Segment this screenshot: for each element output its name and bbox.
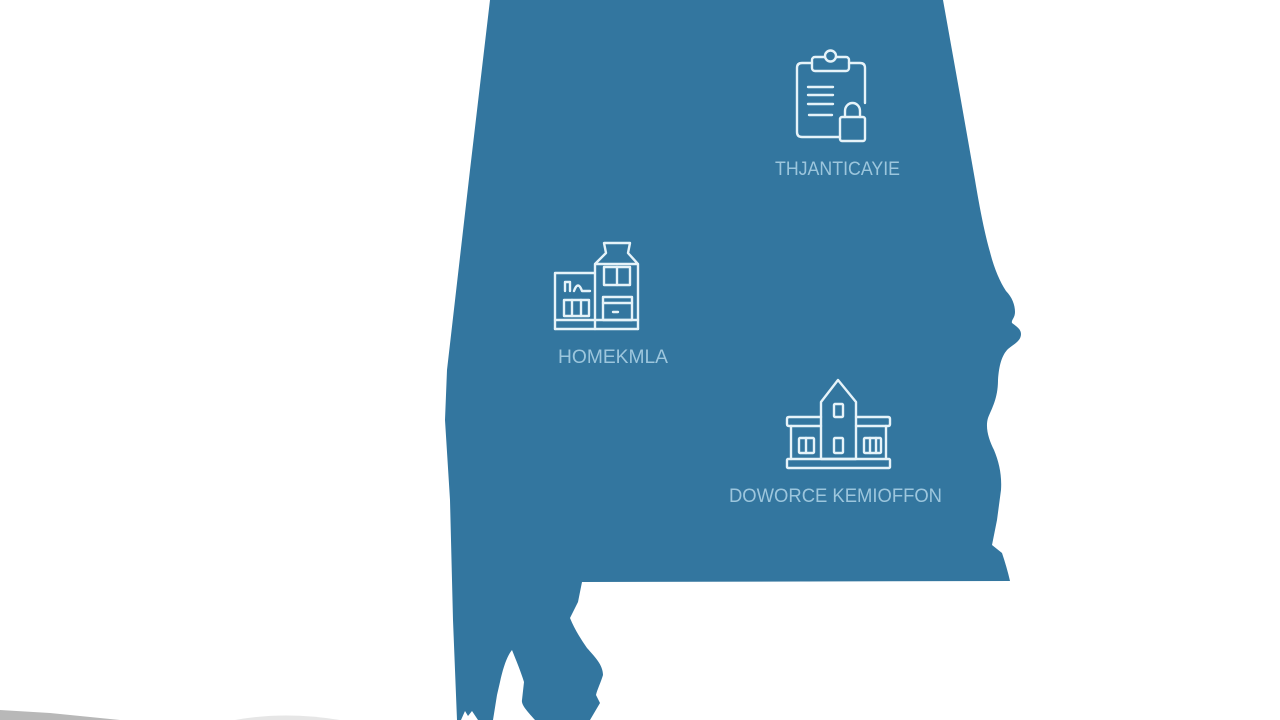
grey shadow: bottom centre — [235, 716, 340, 720]
icon: civic building with central tower — [787, 380, 890, 468]
label: clipboard: THJANTICAYIE — [775, 159, 900, 180]
icon: clipboard with padlock — [797, 50, 865, 141]
label: townhouse: HOMEKMLA — [558, 347, 668, 368]
icon: townhouse building — [555, 243, 638, 329]
label: civic building: DOWORCE KEMIOFFON — [729, 486, 942, 507]
grey shadow: bottom left — [0, 710, 120, 720]
state map silhouette — [445, 0, 1021, 720]
